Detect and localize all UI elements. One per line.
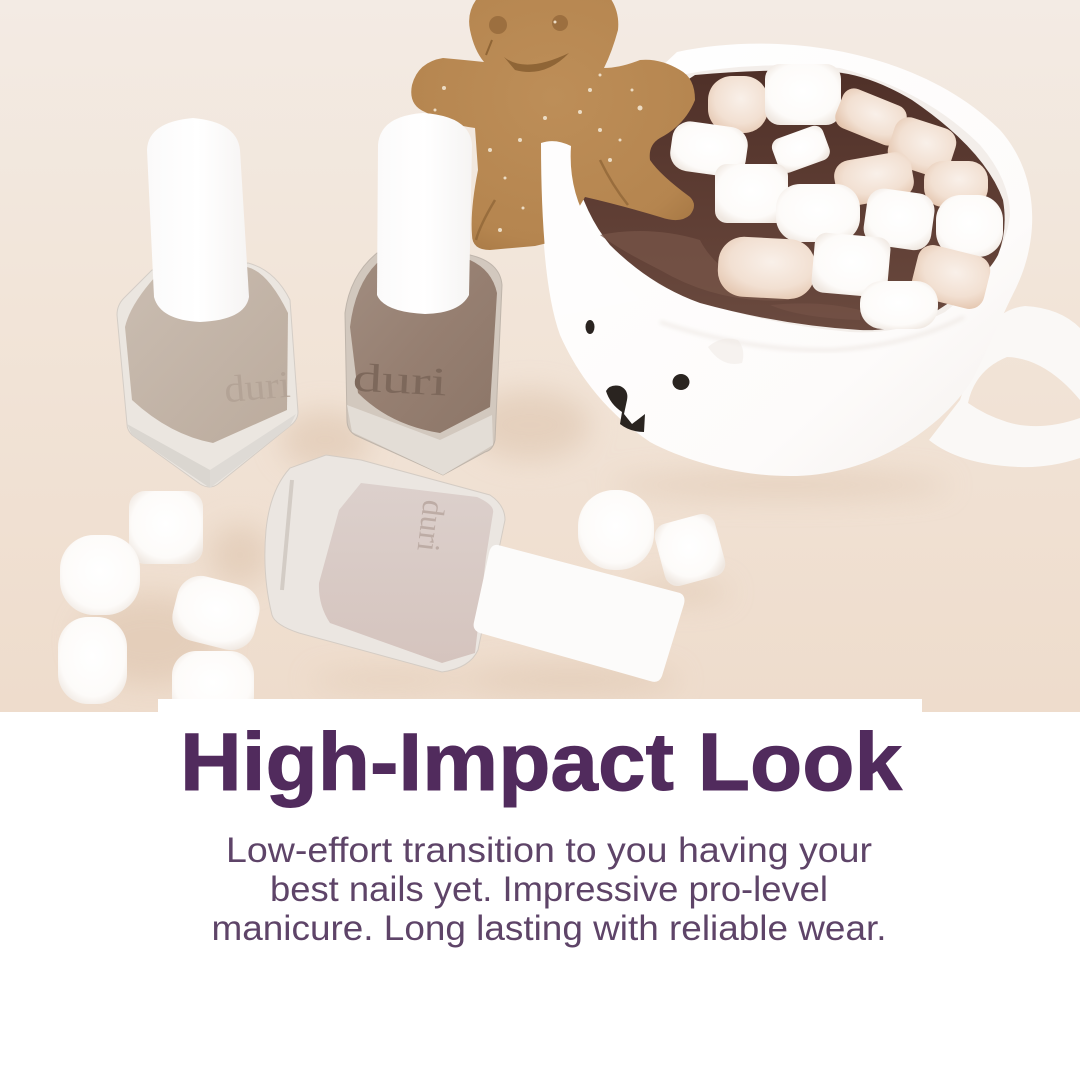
bottle label: duri [223,364,292,411]
bear eyes [586,320,690,390]
bottle: middle [345,113,502,475]
mug [541,44,1080,476]
cap [474,545,684,682]
title: High-Impact Look [180,717,902,808]
bear nose and mouth [606,386,645,432]
gingerbread man [411,0,695,250]
title backing [0,699,1080,1080]
bottle: lying down [265,455,684,682]
description text: Low-effort transition to you having your [226,831,872,870]
mug rim edge shading [660,317,964,350]
photo: nail polish and hot cocoa flat lay [0,0,1080,721]
bottle: left [117,118,298,488]
cookie face [486,15,569,72]
inner mug wall [573,65,1010,332]
marshmallows in cocoa [668,64,1003,329]
description text [212,831,886,948]
cookie cracks and sugar [434,20,642,240]
description text: best nails yet. Impressive pro-level [270,870,828,909]
mug handle [929,306,1080,467]
cap [377,113,472,314]
bear ear [708,339,743,364]
description text: manicure. Long lasting with reliable wear. [212,909,886,948]
mug front wall over cookie [541,141,640,316]
cap [147,118,249,322]
bottle label: duri [410,498,453,554]
mug body [541,44,1032,476]
bottle label: duri [352,355,448,404]
soft shadows [80,390,950,694]
backdrop [0,0,1080,712]
cocoa [573,71,1005,330]
loose marshmallows [58,490,728,721]
